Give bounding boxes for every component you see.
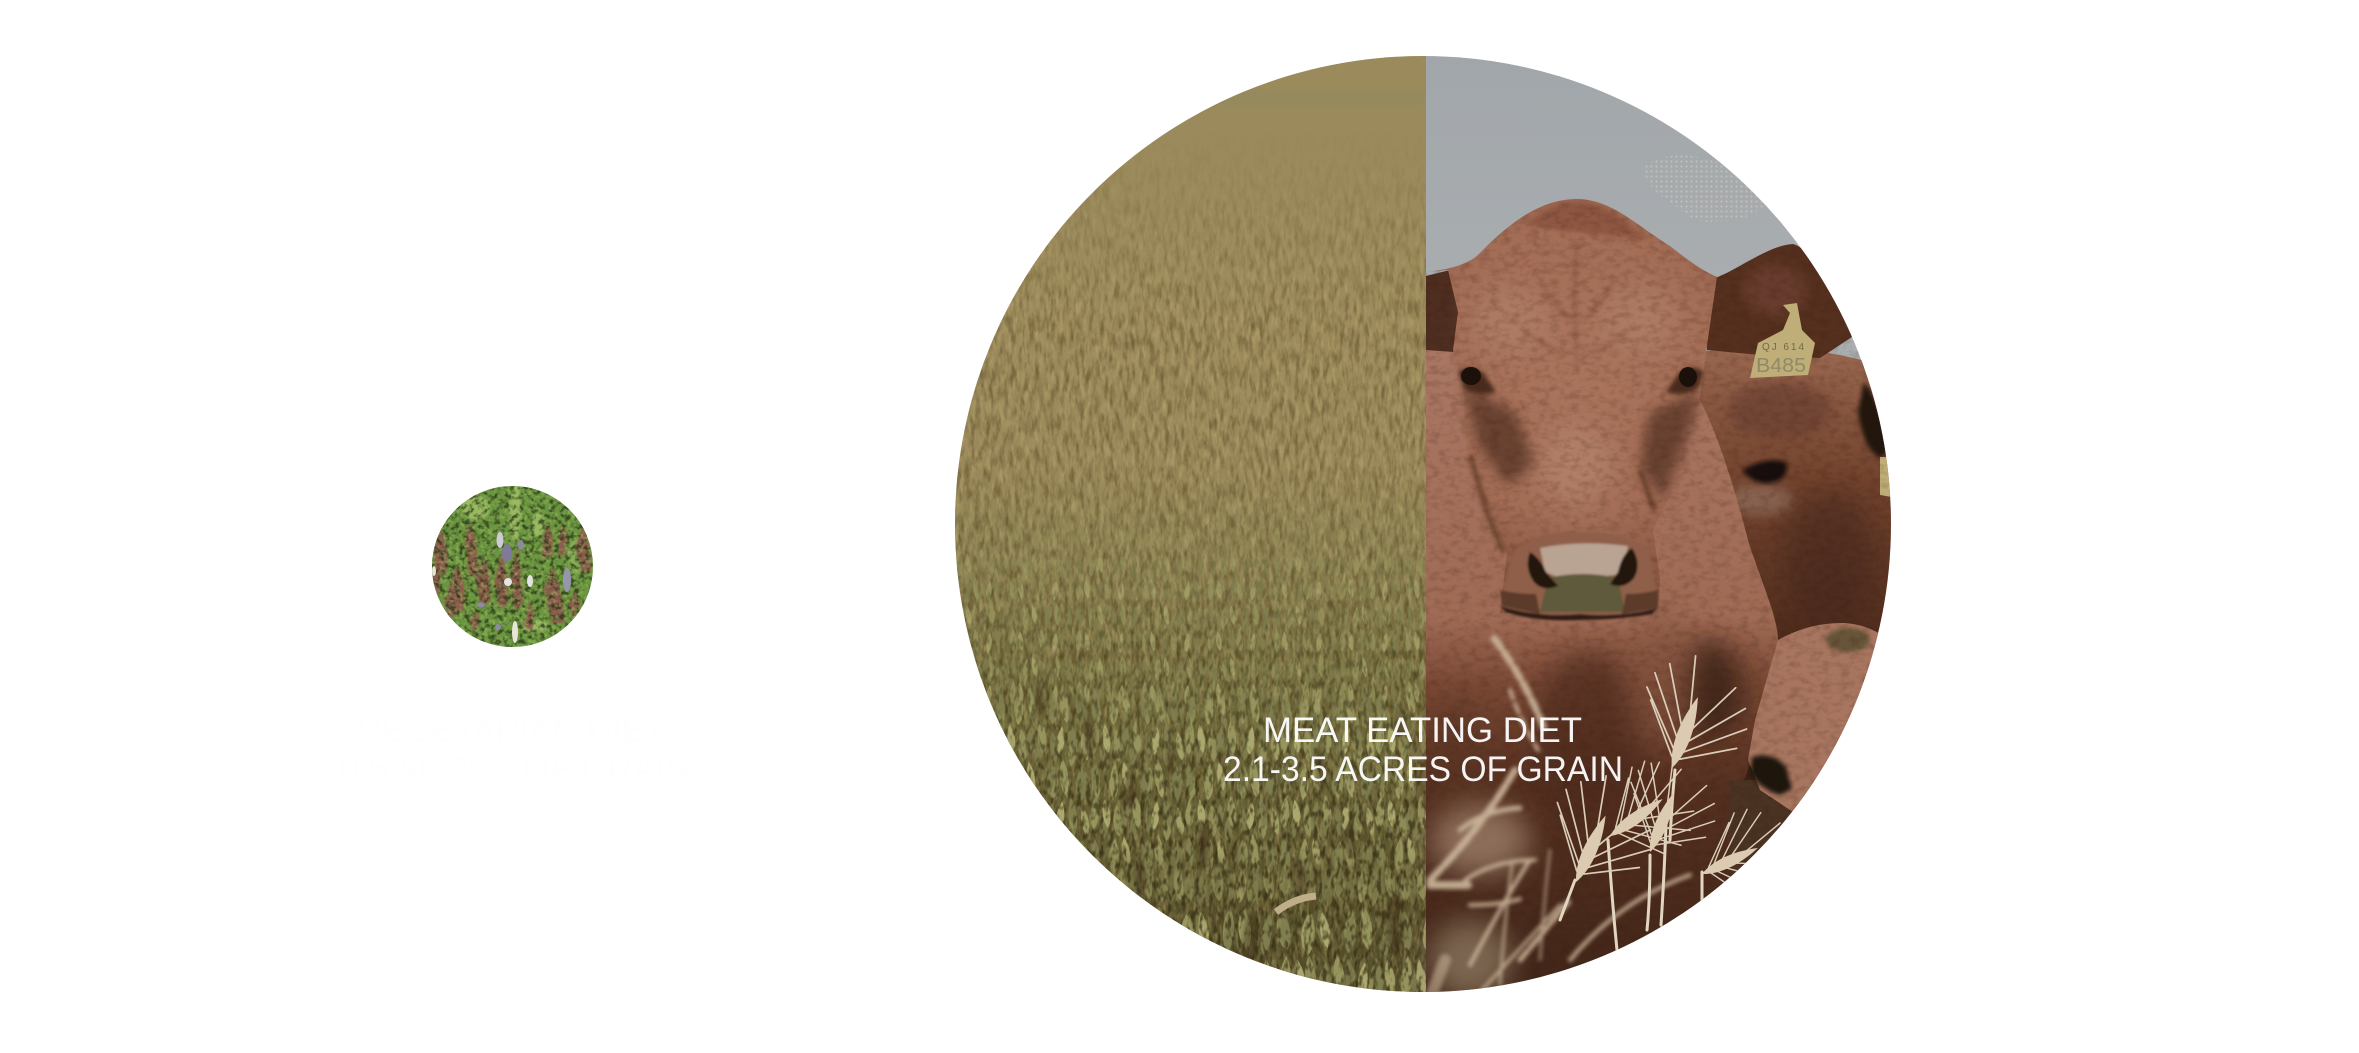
ear tag xyxy=(1750,303,1815,378)
dark ground behind calf xyxy=(1730,780,1815,878)
right ear xyxy=(1700,244,1855,358)
sky xyxy=(1426,50,1896,380)
fur texture xyxy=(1426,190,1896,1000)
panel: vegetarian diet comparison xyxy=(432,486,593,647)
main cow body and neck xyxy=(1426,345,1778,1000)
calf at lower right xyxy=(1748,623,1878,812)
panel: large meat eating diet circle xyxy=(950,50,1900,1000)
eyes xyxy=(1458,367,1704,394)
image: wheat field xyxy=(950,50,1426,1000)
cloud xyxy=(1642,155,1767,222)
main cow head xyxy=(1426,199,1717,613)
caption: meat eating diet xyxy=(1224,717,1620,782)
image: small circle of green and russet wild plants xyxy=(430,484,596,650)
image: cow and wheat xyxy=(1425,50,1900,1000)
caption: vegetarian diet, almost invisible white text: VEGETARIAN DIET xyxy=(358,712,666,750)
second cow behind xyxy=(1699,350,1891,800)
caption line two: 2.1-3.5 ACRES OF GRAIN xyxy=(1223,750,1623,789)
ear tag: QJ 614 xyxy=(1762,342,1804,353)
left ear xyxy=(1426,270,1460,352)
muzzle xyxy=(1500,532,1660,620)
caption line one: MEAT EATING DIET xyxy=(1263,711,1582,750)
ear tag: B485 xyxy=(1756,355,1806,377)
foreground grass and wheat xyxy=(1428,638,1805,1000)
caption line: acres of grain for vegetarian diet: 0.5 ACRES OF GRAIN xyxy=(340,750,690,788)
